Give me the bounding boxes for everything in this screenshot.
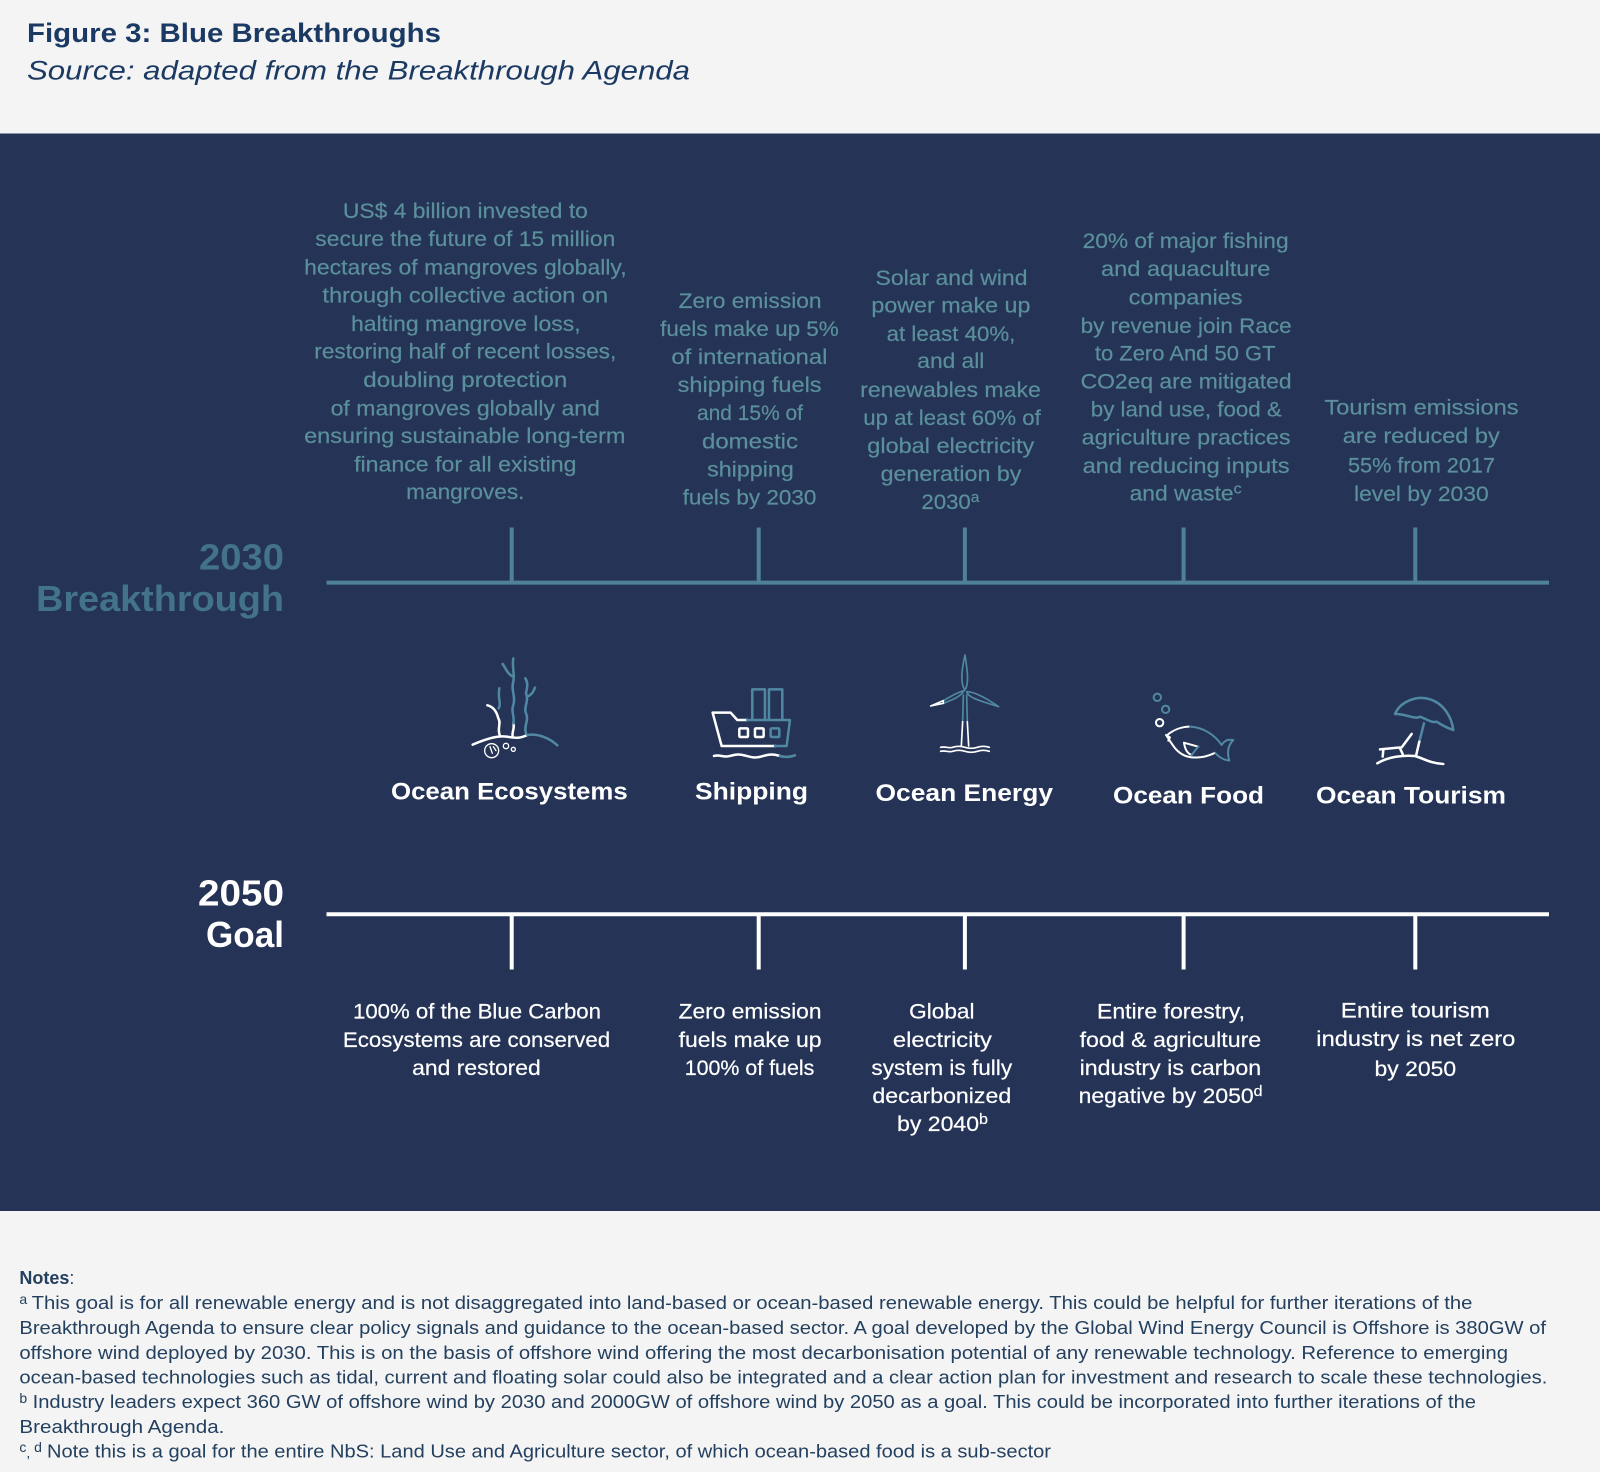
column: Ocean Food 2050 text: industry is carbon [1080,1056,1261,1080]
column: Ocean Energy 2050 text: system is fully [871,1056,1012,1080]
column: Ocean Food 2050 text [1079,1000,1263,1108]
notes: ocean-based technologies such as tidal, current and floating solar could also be integrated and a clear action plan for investment and research to scale these technologies. [19,1368,1547,1388]
column: Ocean Tourism 2050 text: industry is net zero [1316,1027,1515,1051]
column: Ocean Food 2030 text: companies [1129,285,1243,309]
notes [19,1268,1547,1462]
column: Ocean Tourism 2030 text: are reduced by [1343,424,1500,448]
label: 2050 Goal: Goal [206,914,284,955]
column: Ocean Energy 2050 text: decarbonized [872,1084,1011,1108]
column: Shipping 2030 text: fuels by 2030 [683,486,816,510]
column: Ocean Energy 2030 text: power make up [871,294,1030,318]
column: Shipping 2030 text: Zero emission [679,289,822,313]
column: Ocean Ecosystems 2050 text: 100% of the Blue Carbon [353,1000,601,1024]
column: Ocean Ecosystems 2030 text: hectares of mangroves globally, [304,256,627,280]
column: Ocean Energy 2030 text: and all [917,349,984,373]
column: Ocean Tourism 2030 text: 55% from 2017 [1348,453,1495,477]
column: Ocean Energy 2030 text: Solar and wind [876,266,1028,290]
column: Ocean Food 2030 text: c [1234,480,1242,497]
label: 2050 Goal: 2050 [198,872,284,914]
column: Ocean Tourism 2050 text [1316,999,1515,1081]
notes: Notes: [19,1268,74,1288]
timeline: 2050 [326,914,1549,970]
notes: a [19,1291,27,1307]
timeline: 2030 [326,528,1549,583]
column: Ocean Energy 2050 text: electricity [893,1028,992,1052]
column: Ocean Ecosystems 2030 text: through collective action on [322,284,608,308]
column: Ocean Energy 2050 text: by 2040 [897,1112,974,1136]
column: Ocean Energy 2030 text: up at least 60% of [863,406,1041,430]
column: Shipping 2030 text: fuels make up 5% [660,317,839,341]
column: Ocean Energy 2030 text: a [971,489,980,506]
column: Ocean Ecosystems 2030 text: restoring half of recent losses, [314,340,616,364]
column: Ocean Food 2030 text: 20% of major fishing [1083,229,1289,253]
column: Ocean Food 2050 text: negative by 2050 [1079,1084,1242,1108]
title: Figure 3: Blue Breakthroughs [27,18,441,48]
label: 2030 Breakthrough [36,536,284,619]
column: Ocean Food 2050 text: food & agriculture [1080,1028,1261,1052]
column: Ocean Energy 2050 text: Global [909,1000,974,1024]
column: Ocean Energy 2030 text: global electricity [867,434,1035,458]
column: Ocean Food 2050 text: Entire forestry, [1097,1000,1245,1024]
heading: Ocean Food: Ocean Food [1113,782,1264,810]
icon: beach umbrella and lounger [1377,698,1453,764]
column: Shipping 2030 text [660,289,839,510]
column: Ocean Food 2030 text [1081,229,1292,505]
column: Ocean Tourism 2050 text: Entire tourism [1341,999,1490,1023]
notes: Breakthrough Agenda to ensure clear policy signals and guidance to the ocean-based sector. A goal developed by the Global Wind Energy Council is Offshore is 380GW of [19,1318,1547,1338]
column: Ocean Food 2050 text: d [1254,1083,1263,1100]
notes: offshore wind deployed by 2030. This is on the basis of offshore wind offering the most decarbonisation potential of any renewable technology. Reference to emerging [19,1343,1508,1363]
column: Ocean Energy 2030 text: at least 40%, [887,322,1015,346]
column: Shipping 2050 text [679,1000,822,1080]
column: Ocean Food 2030 text: CO2eq are mitigated [1081,369,1292,393]
column: Ocean Energy 2030 text: renewables make [860,378,1041,402]
column: Ocean Ecosystems 2030 text: ensuring sustainable long-term [304,424,626,448]
column: Shipping 2030 text: and 15% of [697,401,803,425]
column: Shipping 2030 text: shipping [707,458,794,482]
column: Shipping 2050 text: 100% of fuels [685,1056,814,1080]
subtitle: source: Source: adapted from the Breakthrough Agenda [27,56,690,86]
column: Shipping 2030 text: shipping fuels [678,373,822,397]
column: Ocean Food 2030 text: to Zero And 50 GT [1095,342,1276,366]
column: Shipping 2030 text: of international [671,345,827,369]
column: Ocean Energy 2030 text [860,266,1041,514]
notes: This goal is for all renewable energy and is not disaggregated into land-based or ocean-based renewable energy. This could be helpful for further iterations of the [32,1293,1472,1313]
notes: , [26,1444,34,1460]
column: Ocean Ecosystems 2030 text: secure the future of 15 million [315,227,615,251]
column: Ocean Ecosystems 2030 text: US$ 4 billion invested to [343,199,588,223]
icon: fish with bubbles [1154,694,1233,761]
column: Ocean Energy 2030 text: generation by [881,462,1022,486]
notes: Breakthrough Agenda. [19,1417,224,1437]
column: Ocean Tourism 2030 text: level by 2030 [1354,482,1489,506]
label: 2030 Breakthrough: Breakthrough [36,578,284,619]
label: 2030 Breakthrough: 2030 [199,536,284,578]
column: Ocean Food 2030 text: by revenue join Race [1081,314,1292,338]
column: Ocean Ecosystems 2050 text [343,1000,610,1080]
column: Ocean Tourism 2030 text: Tourism emissions [1324,396,1518,420]
heading: Ocean Tourism: Ocean Tourism [1316,782,1506,810]
column: Ocean Food 2030 text: by land use, food & [1091,398,1282,422]
column: Ocean Food 2030 text: and reducing inputs [1083,454,1290,478]
column: Ocean Ecosystems 2030 text [304,199,627,504]
column: Ocean Food 2030 text: and waste [1130,481,1228,505]
heading: Ocean Ecosystems: Ocean Ecosystems [391,778,628,806]
column: Ocean Ecosystems 2030 text: halting mangrove loss, [351,312,581,336]
column: Ocean Ecosystems 2050 text: Ecosystems are conserved [343,1028,610,1052]
notes: Note this is a goal for the entire NbS: Land Use and Agriculture sector, of which ocean-based food is a sub-sector [47,1442,1051,1462]
column: Ocean Energy 2030 text: 2030 [921,490,969,514]
icon: ship [713,689,795,757]
heading: Shipping: Shipping [695,778,808,806]
notes: d [34,1439,42,1455]
label: 2050 Goal [198,872,284,955]
column: Ocean Food 2030 text: agriculture practices [1082,426,1291,450]
column: Ocean Ecosystems 2030 text: mangroves. [406,480,524,504]
column: Ocean Ecosystems 2030 text: finance for all existing [354,452,576,476]
icon: wind turbine [931,655,999,752]
column: Ocean Energy 2050 text: b [979,1111,988,1128]
column: Shipping 2050 text: fuels make up [679,1028,822,1052]
column: Shipping 2030 text: domestic [702,429,798,453]
notes: b [19,1390,27,1406]
column: Ocean Energy 2050 text [871,1000,1012,1136]
column: Ocean Ecosystems 2030 text: of mangroves globally and [331,396,600,420]
column: Ocean Ecosystems 2050 text: and restored [412,1056,541,1080]
heading: Ocean Energy: Ocean Energy [876,780,1053,807]
column: Ocean Tourism 2050 text: by 2050 [1374,1057,1456,1081]
panel: dark blue background [0,134,1600,1211]
column: Ocean Food 2030 text: and aquaculture [1101,257,1270,281]
column: Shipping 2050 text: Zero emission [679,1000,822,1024]
notes: Industry leaders expect 360 GW of offshore wind by 2030 and 2000GW of offshore wind by 2050 as a goal. This could be incorporated into further iterations of the [33,1392,1476,1412]
notes: c [19,1439,26,1455]
column: Ocean Ecosystems 2030 text: doubling protection [363,368,567,392]
column: Ocean Tourism 2030 text [1324,396,1518,506]
icon: seaweed and coral [473,658,557,758]
